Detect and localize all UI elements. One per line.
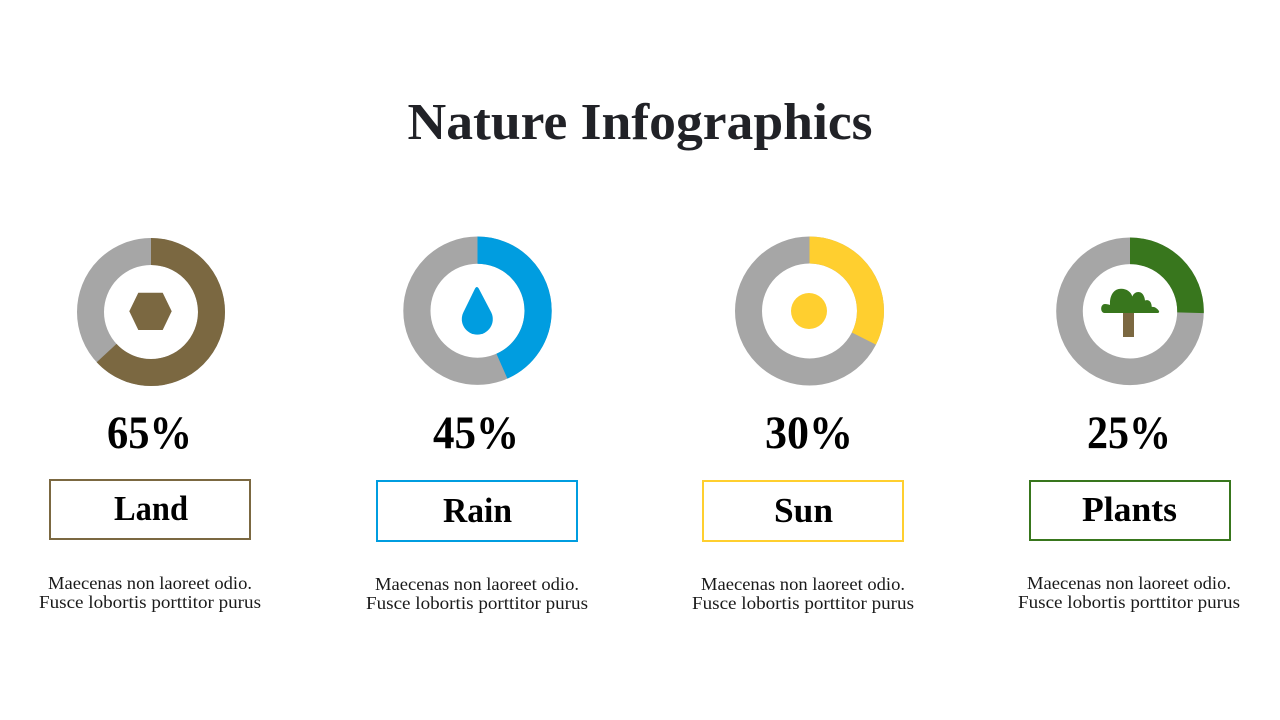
description: land [39, 573, 261, 612]
icon: hexagon land [129, 293, 172, 330]
label box: land [50, 480, 250, 539]
percentage: 30%: 30% [765, 407, 853, 459]
percentage: 25%: 25% [1087, 407, 1171, 459]
label: land: Land [114, 489, 188, 528]
description: rain: Maecenas non laoreet odio. [375, 574, 579, 594]
donut chart: land 65% [90, 252, 212, 372]
icon: water drop [462, 287, 493, 335]
description: sun: Fusce lobortis porttitor purus [692, 593, 914, 613]
panel: rain [366, 250, 588, 613]
donut chart: sun 30% [748, 250, 870, 372]
description: plants: Maecenas non laoreet odio. [1027, 573, 1231, 593]
icon: sun [791, 293, 827, 329]
label box: sun [703, 481, 903, 541]
description: rain: Fusce lobortis porttitor purus [366, 593, 588, 613]
donut chart: plants 25% [1070, 251, 1190, 372]
percentage: 45%: 45% [433, 407, 519, 459]
description: sun: Maecenas non laoreet odio. [701, 574, 905, 594]
description: plants [1018, 573, 1240, 612]
donut chart: rain 45% [417, 250, 538, 371]
description: sun [692, 574, 914, 613]
panel: land [39, 252, 261, 612]
icon: tree [1101, 289, 1159, 337]
panel: sun [692, 250, 914, 613]
description: land: Fusce lobortis porttitor purus [39, 592, 261, 612]
label: rain: Rain [443, 491, 512, 530]
label box: rain [377, 481, 577, 541]
description: rain [366, 574, 588, 613]
percentage: 65%: 65% [107, 407, 192, 459]
label box: plants [1030, 481, 1230, 540]
panel: plants [1018, 251, 1240, 612]
label: sun: Sun [774, 491, 833, 530]
title: Nature Infographics [408, 94, 872, 151]
description: plants: Fusce lobortis porttitor purus [1018, 592, 1240, 612]
label: plants: Plants [1082, 490, 1177, 529]
description: land: Maecenas non laoreet odio. [48, 573, 252, 593]
